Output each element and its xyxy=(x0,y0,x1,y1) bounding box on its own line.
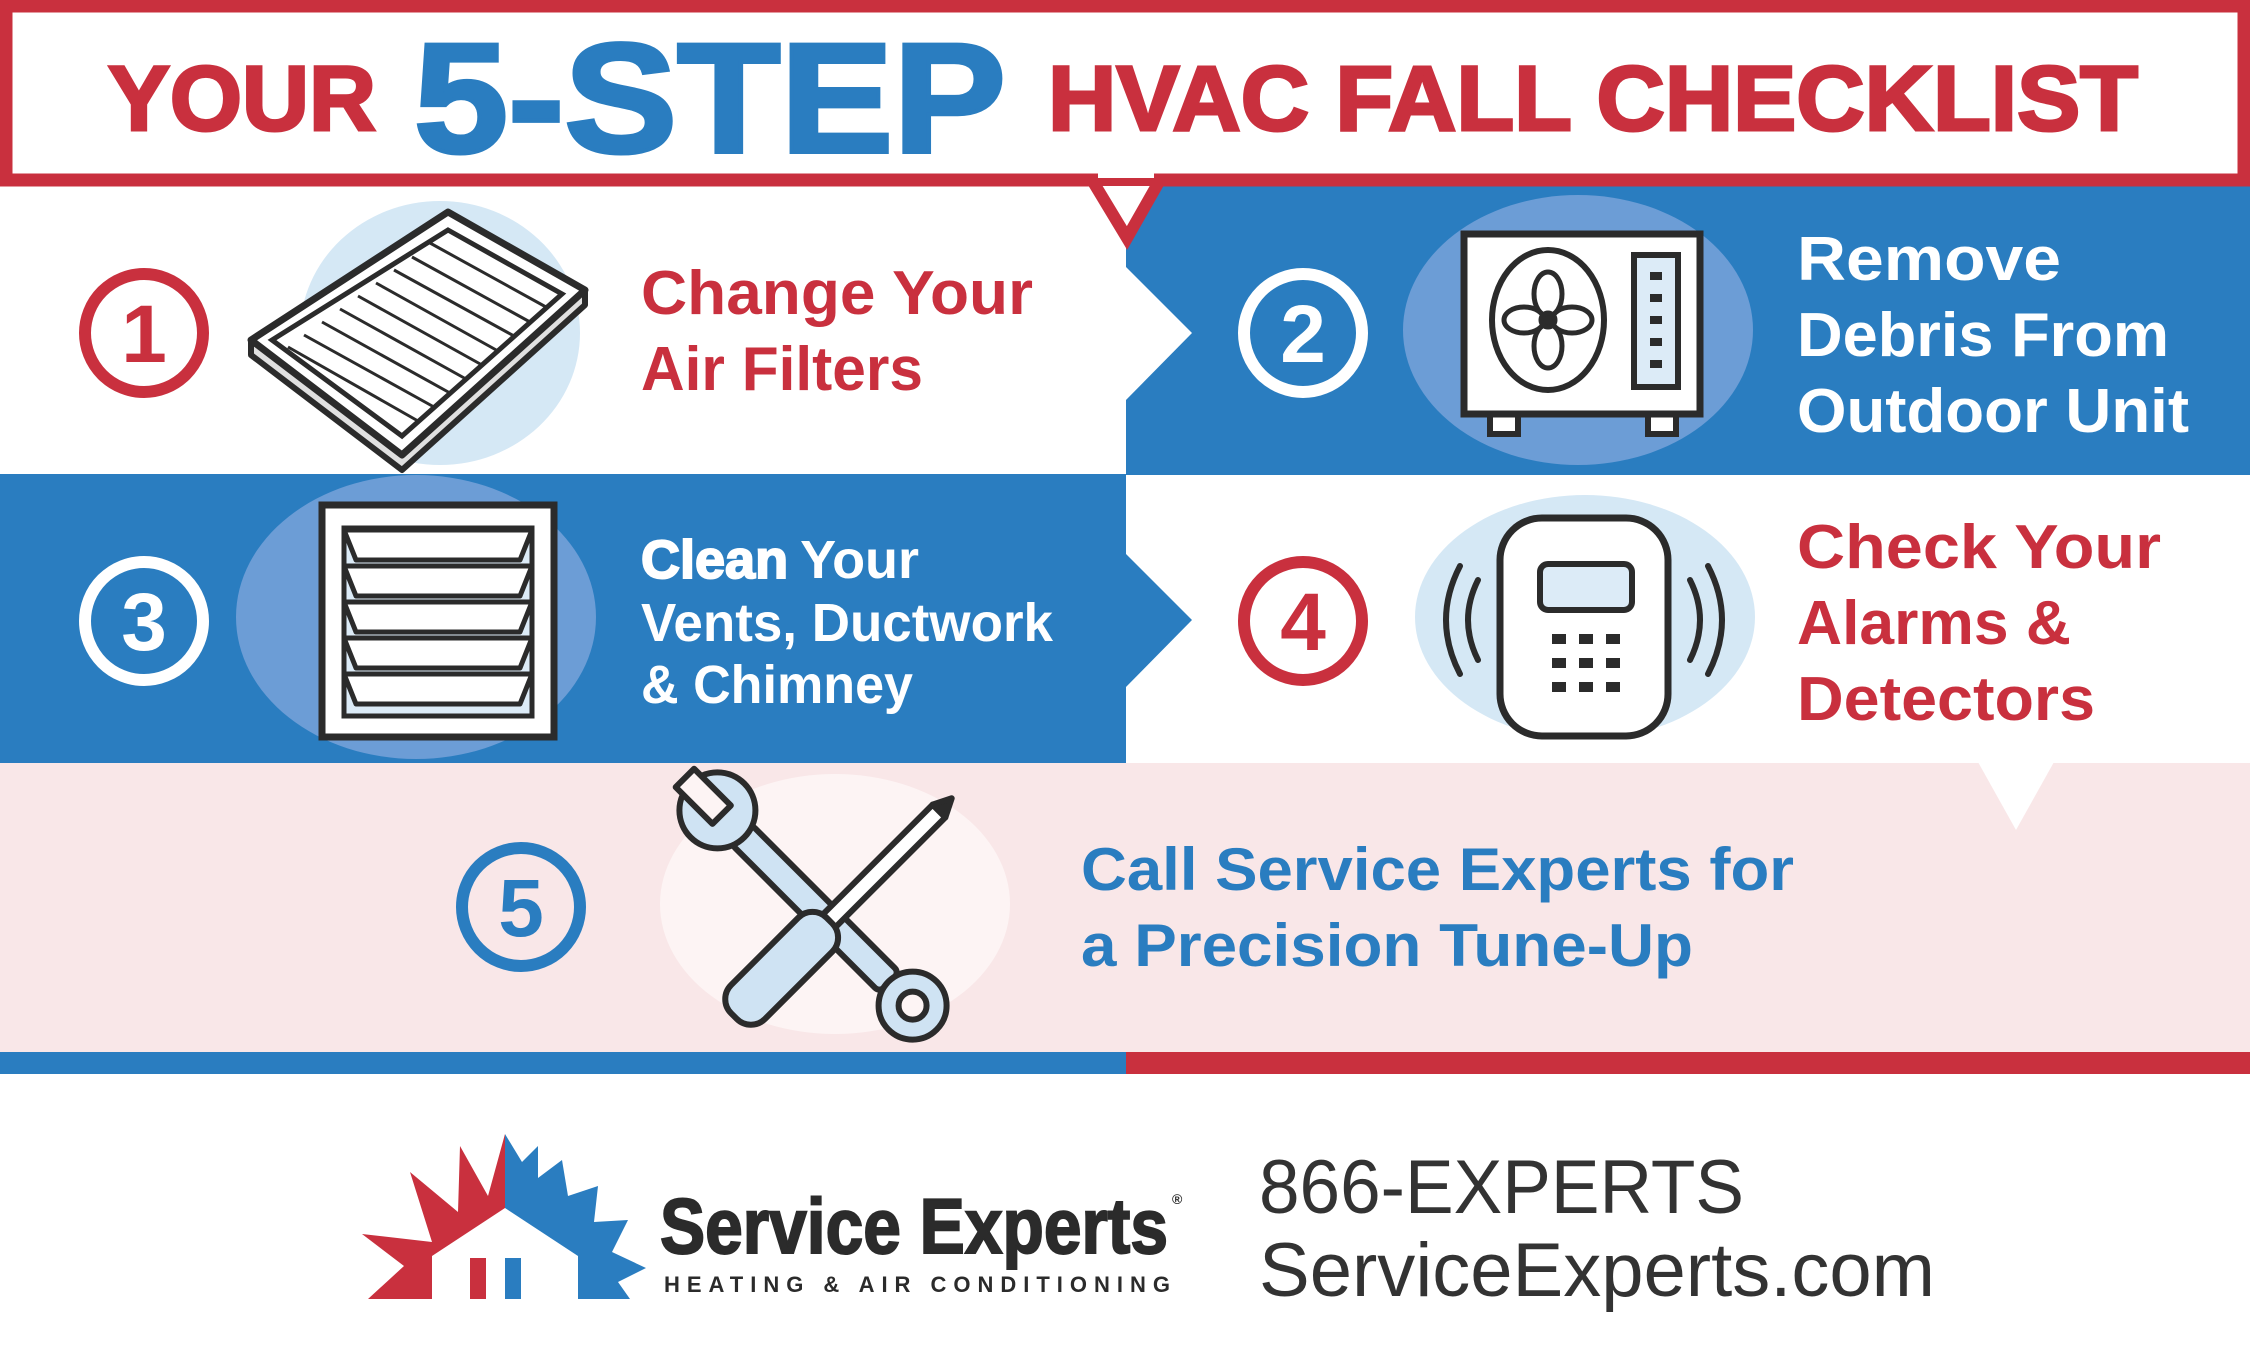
step 2 xyxy=(1244,195,2189,465)
panel: row2 left blue xyxy=(0,474,1126,764)
icon: tools xyxy=(658,751,1010,1056)
text: step 3: & Chimney xyxy=(641,655,913,715)
text: step 3: Vents, Ductwork xyxy=(641,593,1054,653)
title text: YOUR xyxy=(108,48,376,150)
text: step 3: CleanYour xyxy=(641,530,919,590)
arrow: step3 to step4 xyxy=(1124,552,1192,689)
icon: outdoor unit xyxy=(1403,195,1753,465)
text: step 4 xyxy=(1797,513,2161,734)
icon: air filter xyxy=(251,201,585,470)
contact text xyxy=(1259,1145,1935,1313)
panel: row1 right blue xyxy=(1126,185,2250,475)
number circle 1 xyxy=(85,274,203,392)
text: step 4: Alarms & xyxy=(1797,589,2071,658)
number circle 4: 4 xyxy=(1280,577,1326,668)
title text: HVAC FALL CHECKLIST xyxy=(1048,48,2138,150)
number circle 1: 1 xyxy=(121,289,167,380)
text: step 3 xyxy=(641,530,1054,715)
text: step 2: Debris From xyxy=(1797,301,2169,370)
step 1 xyxy=(85,201,1033,470)
text: step 5 xyxy=(1081,836,1794,979)
number circle 4 xyxy=(1244,562,1362,680)
text: step 2: Remove xyxy=(1797,225,2061,294)
icon: logo flame and snowflake xyxy=(362,1134,646,1299)
text: step 5: Call Service Experts for xyxy=(1081,836,1794,903)
text: step 2 xyxy=(1797,225,2189,446)
number circle 3 xyxy=(85,562,203,680)
stripe: blue/red bottom xyxy=(0,1052,2250,1074)
step 5 xyxy=(462,751,1794,1056)
title text: 5-STEP xyxy=(414,12,1006,186)
contact text: ServiceExperts.com xyxy=(1259,1228,1935,1313)
text: step 1 xyxy=(641,259,1033,404)
number circle 5 xyxy=(462,848,580,966)
number circle 2: 2 xyxy=(1280,289,1326,380)
panel: row3 pink xyxy=(0,763,2250,1053)
icon: vent xyxy=(236,475,596,759)
logo xyxy=(362,1134,1183,1299)
icon: alarm detector xyxy=(1415,495,1755,739)
text: step 1: Air Filters xyxy=(641,335,923,404)
text: step 5: a Precision Tune-Up xyxy=(1081,912,1693,979)
arrow: step4 to step5 xyxy=(1978,762,2054,830)
arrow: step1 to step2 xyxy=(1124,265,1192,402)
text: step 4: Check Your xyxy=(1797,513,2161,582)
logo text: Service Experts xyxy=(660,1182,1168,1270)
contact text: 866-EXPERTS xyxy=(1259,1145,1744,1230)
title box xyxy=(6,6,2244,238)
number circle 2 xyxy=(1244,274,1362,392)
text: step 4: Detectors xyxy=(1797,665,2095,734)
logo text: HEATING & AIR CONDITIONING xyxy=(664,1272,1170,1297)
text: step 1: Change Your xyxy=(641,259,1033,328)
number circle 5: 5 xyxy=(498,863,544,954)
step 4 xyxy=(1244,495,2161,739)
text: step 2: Outdoor Unit xyxy=(1797,377,2189,446)
title text xyxy=(108,12,2138,186)
logo text: ® xyxy=(1172,1191,1183,1207)
step 3 xyxy=(85,475,1054,759)
number circle 3: 3 xyxy=(121,577,167,668)
